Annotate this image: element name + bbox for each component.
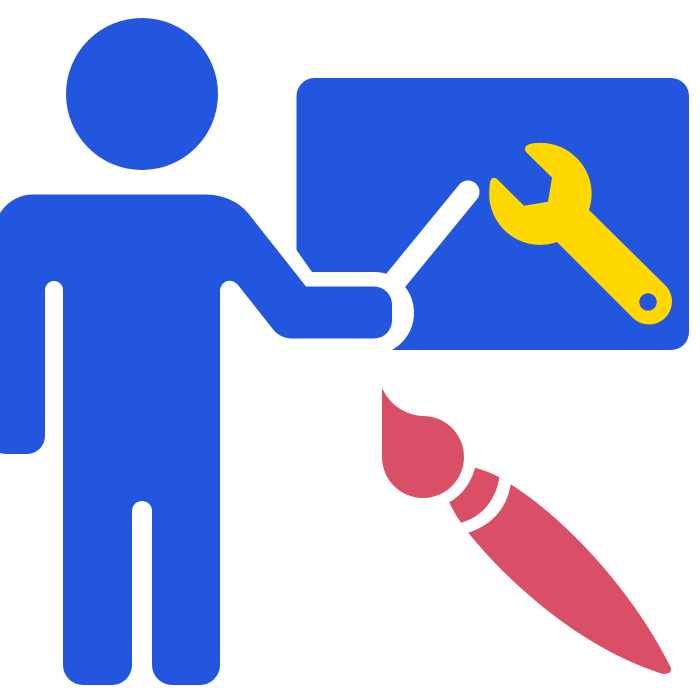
pointer stick bbox=[396, 192, 468, 280]
presenter figure bbox=[0, 18, 392, 685]
brush tip bbox=[382, 388, 464, 498]
head bbox=[66, 18, 218, 170]
brush ferrule bbox=[449, 468, 499, 523]
brush handle bbox=[468, 484, 671, 674]
body bbox=[0, 194, 392, 685]
icon: wrench bbox=[489, 143, 672, 324]
icon: paint brush bbox=[382, 388, 671, 674]
board panel bbox=[280, 78, 689, 350]
